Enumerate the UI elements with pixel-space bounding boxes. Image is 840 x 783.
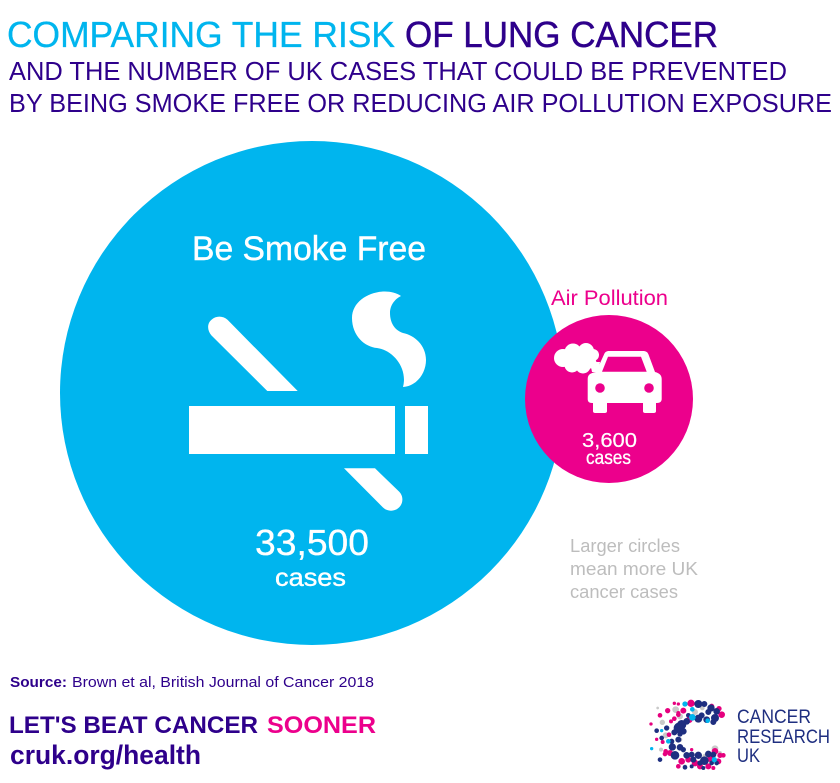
heading: air pollution: Air Pollution	[551, 287, 668, 310]
subtitle: BY BEING SMOKE FREE OR REDUCING AIR POLLUTION EXPOSURE	[9, 88, 832, 118]
logo wordmark: RESEARCH	[737, 727, 830, 748]
source: Source:	[10, 674, 67, 691]
legend note: cancer cases	[570, 582, 678, 602]
title: OF LUNG CANCER	[405, 14, 718, 55]
logo: cancer research uk	[650, 700, 830, 769]
stat: 3,600 cases	[582, 429, 637, 469]
panel: air pollution circle	[525, 315, 693, 483]
stat: 33,500 cases: cases	[275, 564, 346, 592]
logo wordmark	[737, 707, 830, 767]
stat: 3,600 cases: 3,600	[582, 429, 637, 452]
call to action: cruk.org/health	[10, 740, 201, 770]
source: Brown et al, British Journal of Cancer 2018	[72, 674, 374, 691]
title	[7, 14, 718, 55]
stat: 33,500 cases: 33,500	[255, 522, 369, 563]
legend note: mean more UK	[570, 559, 698, 579]
legend note	[570, 536, 698, 602]
subtitle	[9, 56, 832, 118]
stat: 33,500 cases	[255, 522, 369, 592]
legend note: Larger circles	[570, 536, 680, 556]
icon: car with exhaust cloud	[554, 343, 662, 413]
stat: 3,600 cases: cases	[586, 448, 631, 469]
heading: be smoke free: Be Smoke Free	[192, 230, 426, 268]
call to action: LET'S BEAT CANCER	[9, 712, 258, 739]
subtitle: AND THE NUMBER OF UK CASES THAT COULD BE PREVENTED	[9, 56, 787, 86]
icon: dotted c mark	[650, 700, 725, 769]
title: COMPARING THE RISK	[7, 14, 395, 55]
call to action: SOONER	[267, 712, 376, 739]
logo wordmark: CANCER	[737, 707, 811, 728]
call to action	[9, 712, 376, 770]
icon: no smoking cigarette	[189, 292, 428, 511]
panel: be smoke free circle	[60, 141, 564, 645]
logo wordmark: UK	[737, 746, 760, 767]
